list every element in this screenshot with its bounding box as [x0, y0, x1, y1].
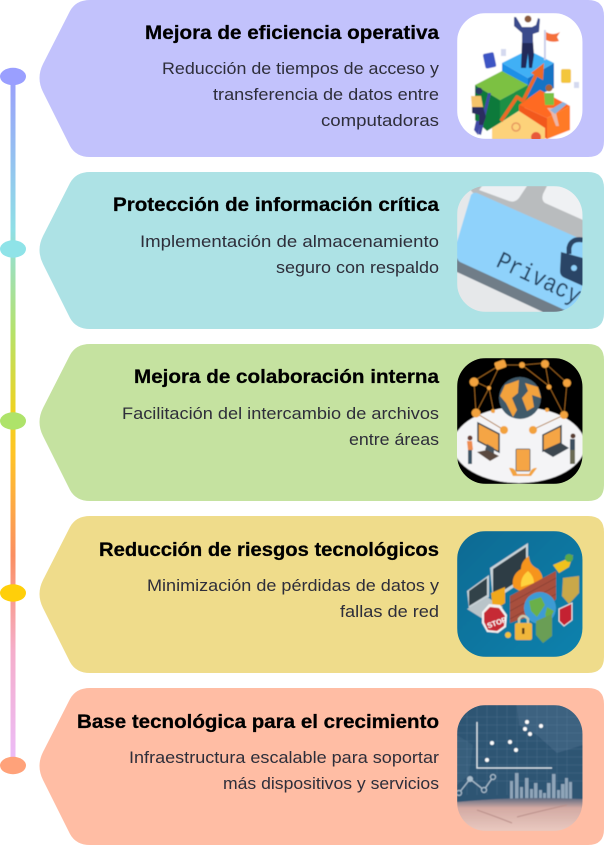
- stop sign label: STOP: [486, 615, 508, 630]
- description 5: [129, 749, 440, 793]
- panel: Mejora de colaboración interna: [40, 344, 604, 501]
- panel: Reducción de riesgos tecnológicos: [40, 516, 604, 673]
- description 1: computadoras: [321, 112, 439, 130]
- icon: privacy keyboard key: [457, 186, 585, 312]
- description 3: Facilitación del intercambio de archivos: [122, 405, 439, 423]
- timeline line: [10, 80, 16, 765]
- panel: Base tecnológica para el crecimiento: [40, 688, 604, 845]
- icon: data chart over hand: [456, 705, 583, 831]
- timeline marker 3: [0, 412, 26, 430]
- description 1: Reducción de tiempos de acceso y: [162, 60, 440, 78]
- timeline marker 1: [0, 68, 26, 85]
- panel: Mejora de eficiencia operativa: [40, 0, 604, 157]
- description 4: [147, 577, 440, 621]
- description 5: Infraestructura escalable para soportar: [129, 749, 440, 767]
- description 1: [162, 60, 440, 130]
- description 1: transferencia de datos entre: [213, 86, 439, 104]
- description 4: Minimización de pérdidas de datos y: [147, 577, 440, 595]
- description 5: más dispositivos y servicios: [223, 775, 439, 793]
- timeline marker 5: [0, 757, 26, 774]
- heading 2: Protección de información crítica: [113, 195, 439, 216]
- description 2: seguro con respaldo: [276, 259, 439, 277]
- panel shape 5: [40, 688, 604, 845]
- panel: Protección de información crítica: [40, 172, 604, 329]
- panel shape 2: [40, 172, 604, 329]
- panel shape 4: [40, 516, 604, 673]
- heading 4: Reducción de riesgos tecnológicos: [99, 540, 439, 561]
- heading 5: Base tecnológica para el crecimiento: [77, 712, 439, 733]
- description 2: [140, 233, 439, 277]
- description 3: entre áreas: [349, 431, 439, 449]
- description 4: fallas de red: [340, 603, 439, 621]
- icon: growth steps illustration: [457, 13, 583, 142]
- timeline marker 2: [0, 240, 26, 258]
- heading 1: Mejora de eficiencia operativa: [145, 23, 439, 44]
- panel shape 3: [40, 344, 604, 501]
- description 3: [122, 405, 439, 449]
- panel shape 1: [40, 0, 604, 157]
- heading 3: Mejora de colaboración interna: [134, 367, 439, 388]
- key label: Privacy: [492, 247, 585, 311]
- icon: global network illustration: [453, 358, 585, 484]
- timeline marker 4: [0, 584, 26, 602]
- icon: network security illustration: [457, 531, 583, 657]
- description 2: Implementación de almacenamiento: [140, 233, 439, 251]
